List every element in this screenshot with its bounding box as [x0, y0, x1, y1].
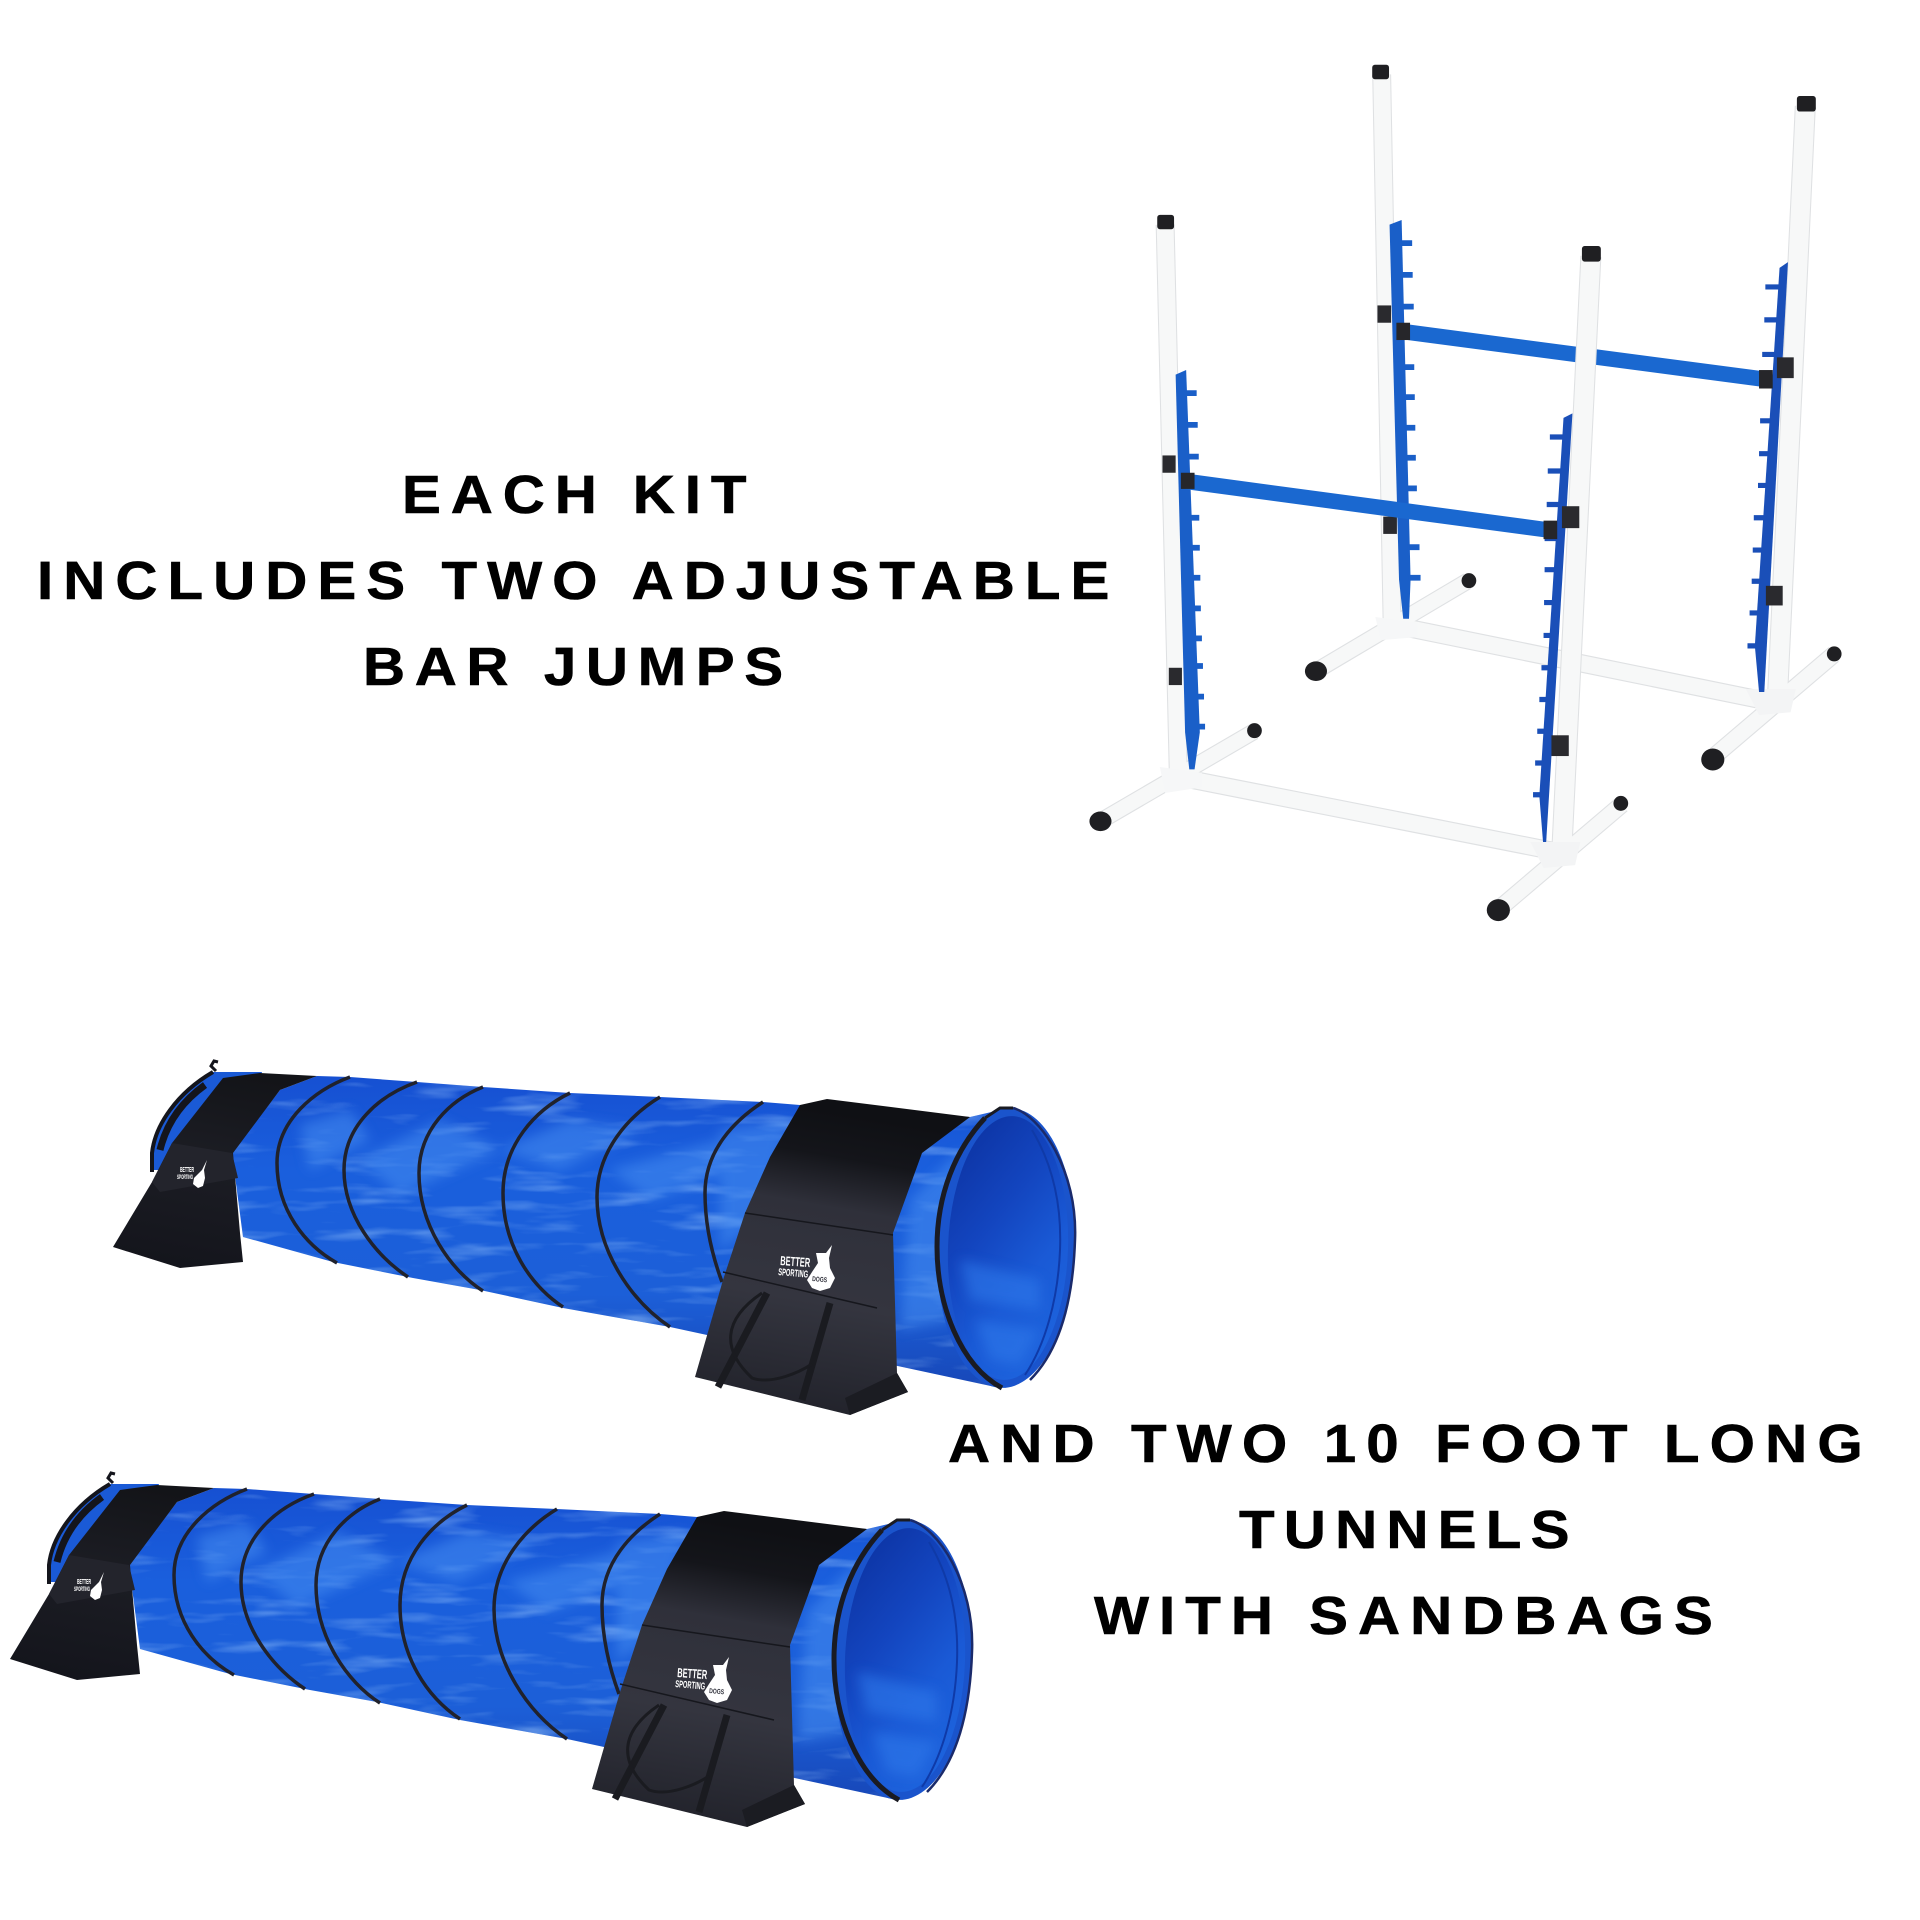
near sandbag logo: SPORTING [778, 1267, 809, 1281]
far sandbag logo: SPORTING [177, 1175, 193, 1181]
front bar jump [1089, 215, 1628, 921]
illustration: upper tunnel with sandbags [113, 1061, 1080, 1415]
front jump right rack [1533, 413, 1572, 842]
far sandbag logo [177, 1160, 207, 1188]
lower near sandbag logo: SPORTING [675, 1679, 706, 1693]
text: and two 10 foot long tunnels with sandbags: TUNNELS [1239, 1499, 1569, 1560]
text: and two 10 foot long tunnels with sandbags: WITH SANDBAGS [1094, 1585, 1713, 1646]
lower far sandbag [10, 1485, 214, 1680]
lower sandbag handles [615, 1705, 727, 1812]
illustration: lower tunnel with sandbags [10, 1473, 977, 1827]
far sandbag logo: BETTER [180, 1167, 194, 1174]
near sandbag logo [778, 1245, 835, 1291]
text: each kit includes two adjustable bar jumps: INCLUDES TWO ADJUSTABLE [37, 550, 1109, 611]
lower far sandbag logo: SPORTING [74, 1587, 90, 1593]
lower far sandbag logo: BETTER [77, 1579, 91, 1586]
text: each kit includes two adjustable bar jumps [37, 464, 1109, 697]
front jump left rack [1176, 370, 1205, 769]
lower near sandbag logo: DOGS [709, 1688, 725, 1696]
sandbag handles [718, 1293, 830, 1400]
near sandbag logo: DOGS [812, 1276, 828, 1284]
back bar jump [1305, 65, 1842, 770]
text: and two 10 foot long tunnels with sandbags: AND TWO 10 FOOT LONG [948, 1413, 1863, 1474]
lower tunnel hoop rings [174, 1489, 660, 1739]
lower near sandbag [592, 1511, 867, 1827]
front jump blue bar [1186, 481, 1551, 530]
back jump left rack [1390, 220, 1421, 619]
lower tunnel front opening [829, 1518, 977, 1802]
lower near sandbag logo: BETTER [677, 1665, 708, 1682]
lower tunnel far end [49, 1484, 159, 1582]
lower tunnel hook [108, 1473, 115, 1483]
tunnel hoop rings [277, 1077, 763, 1327]
text: and two 10 foot long tunnels with sandbags [948, 1413, 1863, 1646]
lower far sandbag logo [74, 1572, 104, 1600]
far sandbag [113, 1073, 317, 1268]
text: each kit includes two adjustable bar jumps: EACH KIT [402, 464, 747, 525]
lower tunnel body [129, 1488, 897, 1800]
near sandbag logo: BETTER [780, 1253, 811, 1270]
tunnel far end [152, 1072, 262, 1170]
near sandbag [695, 1099, 970, 1415]
tunnel hook [211, 1061, 218, 1071]
text: each kit includes two adjustable bar jumps: BAR JUMPS [363, 636, 783, 697]
back jump right rack [1747, 262, 1788, 692]
tunnel body [232, 1076, 1000, 1388]
lower near sandbag logo [675, 1657, 732, 1703]
illustration: two adjustable bar jumps [1089, 65, 1842, 921]
tunnel front opening [932, 1106, 1080, 1390]
back jump blue bar [1402, 331, 1764, 379]
